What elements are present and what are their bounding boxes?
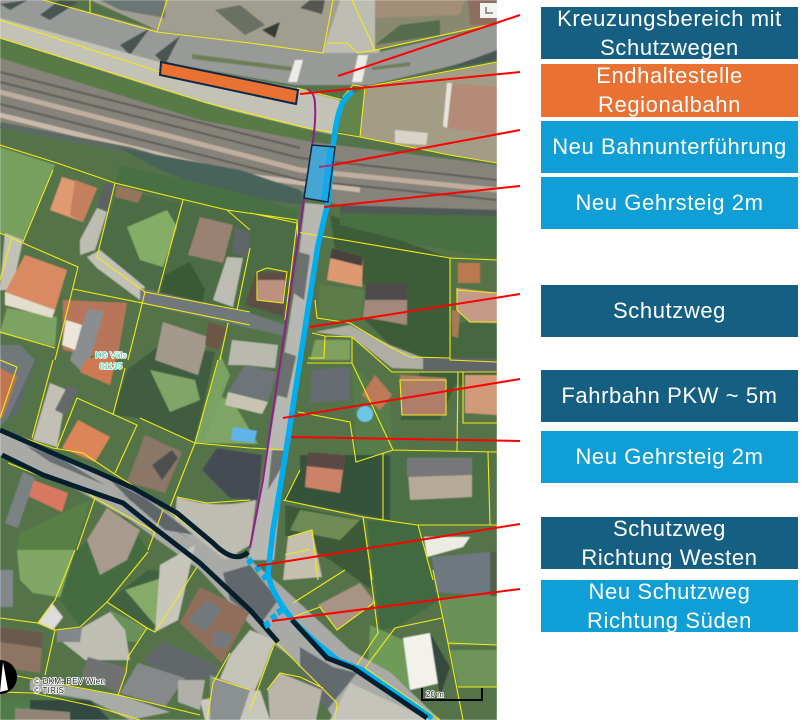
copyright: © DKM: BEV Wien — [34, 677, 105, 686]
label: Gehrsteig north — [541, 177, 798, 229]
left paved areas — [33, 383, 67, 447]
label: Schutzweg Westen: Schutzweg — [613, 516, 726, 541]
leader: Schutzweg Westen — [257, 524, 520, 566]
leader: Gehrsteig south — [291, 437, 520, 441]
compass — [0, 660, 17, 694]
local streets — [316, 324, 424, 370]
parcel boundaries — [0, 0, 497, 720]
leader: Schutzweg — [310, 294, 520, 327]
north arrow — [480, 3, 497, 18]
label: Gehrsteig north: Neu Gehrsteig 2m — [575, 190, 764, 215]
pavement and embankment — [0, 18, 340, 135]
new sidewalk: blue line — [268, 92, 432, 718]
cadastral label: KG Völs — [95, 350, 127, 360]
map with overlays — [0, 0, 520, 720]
crossing south — [263, 607, 284, 629]
label: Kreuzungsbereich: Kreuzungsbereich mit — [557, 6, 782, 31]
underpass block — [304, 145, 335, 202]
scale bar: 20 m — [426, 690, 444, 699]
leader: Schutzweg Süden — [272, 589, 520, 621]
lower main road — [0, 430, 440, 720]
cadastral label: 81135 — [99, 361, 123, 371]
rail tracks — [0, 58, 497, 212]
label: Schutzweg Süden: Neu Schutzweg — [589, 579, 750, 604]
scale bar — [422, 688, 482, 700]
label: Fahrbahn: Fahrbahn PKW ~ 5m — [561, 383, 778, 408]
label: Kreuzungsbereich — [541, 7, 798, 59]
label: Endhaltestelle — [541, 64, 798, 117]
label: Gehrsteig south — [541, 431, 798, 483]
planned path: purple line — [250, 89, 315, 548]
lawns and foliage — [0, 147, 55, 240]
eastern dark road edge — [292, 620, 427, 718]
label: Kreuzungsbereich: Schutzwegen — [600, 35, 739, 60]
end stop Regionalbahn marker — [160, 62, 298, 104]
leader: Gehrsteig north — [324, 186, 520, 207]
label: Bahnunterführung — [541, 121, 798, 173]
rooftops — [100, 0, 165, 18]
label: Schutzweg Westen: Richtung Westen — [581, 545, 758, 570]
copyright — [34, 677, 105, 695]
southern dark road edge — [2, 455, 278, 642]
northern dark road edge — [0, 430, 248, 557]
label: Schutzweg — [541, 285, 798, 337]
label: Bahnunterführung: Neu Bahnunterführung — [552, 134, 787, 159]
copyright: © TIRIS — [34, 686, 64, 695]
leader: underpass purple end — [319, 165, 333, 167]
label: Gehrsteig south: Neu Gehrsteig 2m — [575, 444, 764, 469]
parking north — [90, 0, 340, 53]
upper road — [0, 0, 497, 85]
label: Endhaltestelle: Endhaltestelle — [596, 63, 743, 88]
label: Schutzweg: Schutzweg — [613, 298, 726, 323]
leader lines — [257, 15, 520, 621]
cadastral label — [95, 350, 127, 371]
label: Endhaltestelle: Regionalbahn — [598, 92, 741, 117]
yard north-east — [360, 62, 497, 163]
aerial photo base — [0, 0, 497, 720]
label: Fahrbahn — [541, 370, 798, 422]
leader: Endhaltestelle — [300, 72, 520, 94]
crossing west — [246, 557, 266, 581]
label: Schutzweg Süden: Richtung Süden — [587, 608, 752, 633]
leader: Fahrbahn — [283, 379, 520, 418]
side road — [248, 203, 328, 560]
leader: Kreuzungsbereich — [338, 15, 520, 76]
label: Schutzweg Süden — [541, 580, 798, 632]
leader: Bahnunterführung — [333, 130, 520, 165]
label: Schutzweg Westen — [541, 517, 798, 569]
